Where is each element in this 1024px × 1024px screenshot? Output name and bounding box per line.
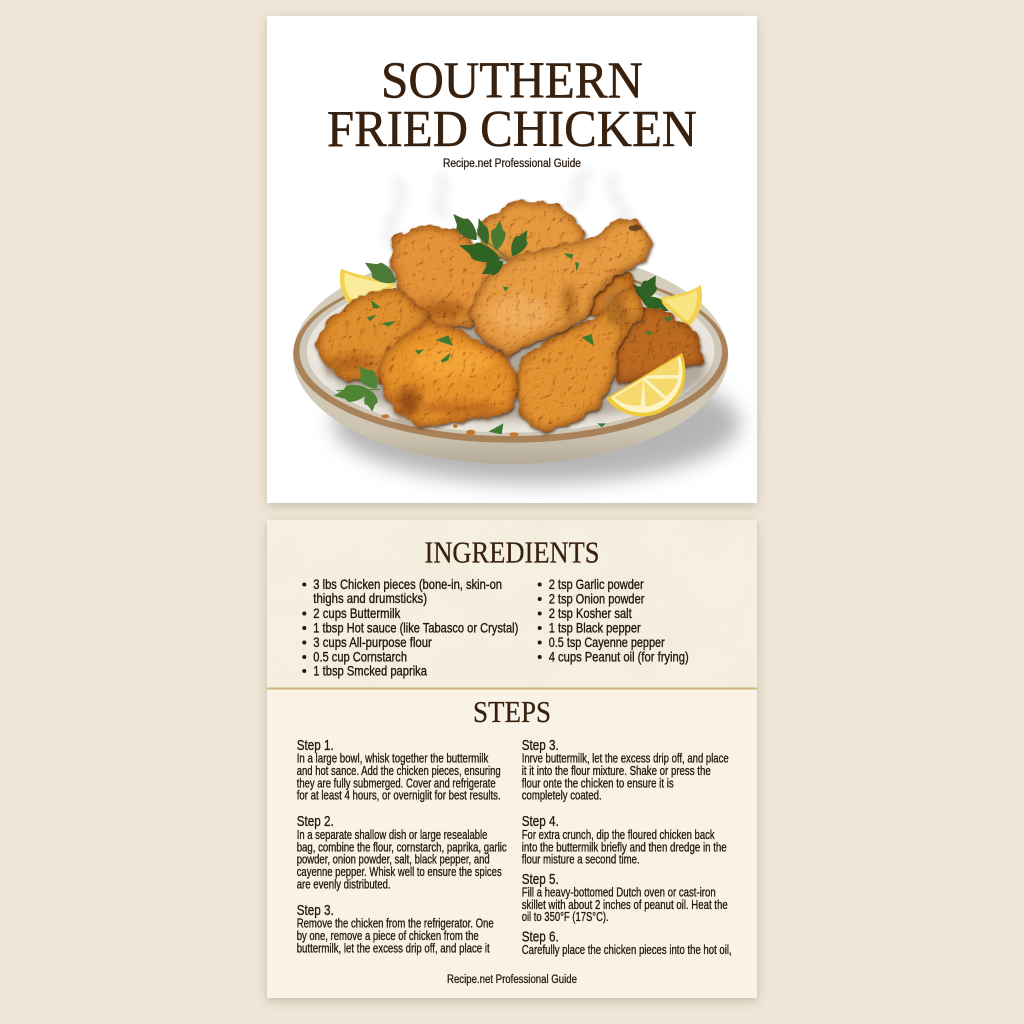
step 3 right: Step 3.: [522, 738, 559, 754]
step 6: Step 6.: [522, 930, 559, 946]
herb: front left sprig: [333, 361, 383, 412]
step 2: [297, 814, 507, 891]
lemon wedge: back right: [657, 285, 702, 327]
subtitle: Recipe.net Professional Guide: [443, 156, 581, 170]
ingredient list: right column: 4 cups Peanut oil (for frying): [549, 650, 689, 664]
step 3 right: it it into the flour mixture. Shake or press the: [522, 764, 711, 778]
step 1: for at least 4 hours, or overniglit for best results.: [297, 789, 501, 803]
step 6: Carefully place the chicken pieces into the hot oil,: [522, 943, 732, 957]
step 5: oil to 350°F (17S°C).: [522, 910, 609, 924]
herb: back sprigs: [360, 255, 672, 318]
ingredient list: left column: 2 cups Buttermilk: [313, 606, 400, 621]
step 2: are evenly distributed.: [297, 877, 391, 891]
step 1: [297, 738, 501, 803]
step 3 left: by one, remove a piece of chicken from the: [297, 929, 479, 943]
step 3 left: buttermilk, let the excess drip off, and place it: [297, 941, 490, 955]
step 4: Step 4.: [522, 814, 559, 830]
step 6: [522, 930, 732, 957]
step 3 right: [522, 738, 729, 803]
step 2: cayenne pepper. Whisk well to ensure the spices: [297, 865, 502, 879]
chicken piece: back wing: [480, 203, 585, 262]
panel: ingredients: [267, 520, 757, 688]
plate: [293, 247, 728, 464]
crumbs: [381, 414, 519, 436]
ingredient list: left column: 3 lbs Chicken pieces (bone-in, skin-on: [313, 577, 502, 592]
step 5: Fill a heavy-bottomed Dutch oven or cast-iron: [522, 886, 716, 900]
steam: [389, 175, 627, 245]
step 1: In a large bowl, whisk together the buttermilk: [297, 752, 489, 766]
lemon wedge: back left: [340, 268, 397, 305]
title: [327, 52, 697, 158]
step 2: Step 2.: [297, 814, 334, 830]
ingredient list: right column: 2 tsp Kosher salt: [549, 606, 632, 621]
step 3 left: Remove the chicken from the refrigerator. One: [297, 917, 494, 931]
step 4: [522, 814, 727, 867]
step 4: into the buttermilk briefly and then dredge in the: [522, 840, 727, 854]
ingredient list: left column: [302, 577, 518, 678]
ingredient list: left column: thighs and drumsticks): [313, 591, 427, 606]
ingredient list: right column: 0.5 tsp Cayenne pepper: [549, 635, 665, 650]
step 3 right: flour onte the chicken to ensure it is: [522, 776, 674, 790]
ingredient list: right column: 2 tsp Garlic powder: [549, 577, 644, 592]
ingredient list: right column: [538, 577, 689, 664]
ingredient list: left column: 1 tbsp Smcked paprika: [313, 664, 427, 678]
step 1: they are fully submerged. Cover and refrigerate: [297, 776, 496, 790]
ingredient list: right column: 2 tsp Onion powder: [549, 592, 645, 606]
ingredient list: left column: 0.5 cup Cornstarch: [313, 650, 407, 664]
step 2: In a separate shallow dish or large resealable: [297, 828, 487, 842]
step 5: Step 5.: [522, 872, 559, 888]
chicken piece: left thigh: [318, 290, 427, 378]
heading: ingredients: INGREDIENTS: [424, 534, 600, 569]
panel: hero card: [267, 16, 757, 503]
step 4: flour misture a second time.: [522, 853, 640, 867]
step 1: and hot sance. Add the chicken pieces, ensuring: [297, 764, 501, 778]
step 1: Step 1.: [297, 738, 334, 754]
lemon wedge: front: [606, 353, 685, 416]
step 4: For extra crunch, dip the floured chicken back: [522, 828, 715, 842]
chicken piece: lower drumstick: [517, 290, 640, 430]
step 2: powder, onion powder, salt, black pepper, and: [297, 853, 490, 867]
panel: steps: [297, 694, 732, 986]
step 5: [522, 872, 728, 924]
title: FRIED CHICKEN: [327, 101, 697, 158]
illustration: fried chicken on a plate: [293, 203, 740, 483]
step 5: skillet with about 2 inches of peanut oil. Heat the: [522, 898, 728, 912]
chicken piece: front thigh: [382, 323, 517, 424]
step 2: bag, combine the flour, cornstarch, paprika, garlic: [297, 840, 507, 854]
chicken piece: hidden thigh behind drumsticks: [587, 273, 631, 315]
ingredient list: left column: 1 tbsp Hot sauce (like Tabasco or Crystal): [313, 620, 518, 636]
step 3 left: Step 3.: [297, 903, 334, 919]
footer: Recipe.net Professional Guide: [447, 972, 577, 986]
ingredient list: right column: 1 tsp Black pepper: [549, 620, 641, 636]
step 3 left: [297, 903, 494, 955]
heading: steps: STEPS: [473, 694, 551, 729]
herb flecks: [367, 253, 673, 434]
panel: recipe card: [267, 520, 757, 998]
chicken piece: right thigh: [613, 310, 701, 381]
ingredient list: left column: 3 cups All-purpose flour: [313, 635, 432, 650]
title: SOUTHERN: [381, 52, 643, 110]
plate shadow: [333, 363, 740, 483]
chicken piece: back left thigh: [393, 228, 492, 325]
chicken piece: upper drumstick: [470, 219, 649, 353]
step 3 right: Inrve buttermilk, let the excess drip off, and place: [522, 752, 729, 766]
step 3 right: completely coated.: [522, 789, 602, 803]
herb: top sprig: [447, 209, 534, 280]
